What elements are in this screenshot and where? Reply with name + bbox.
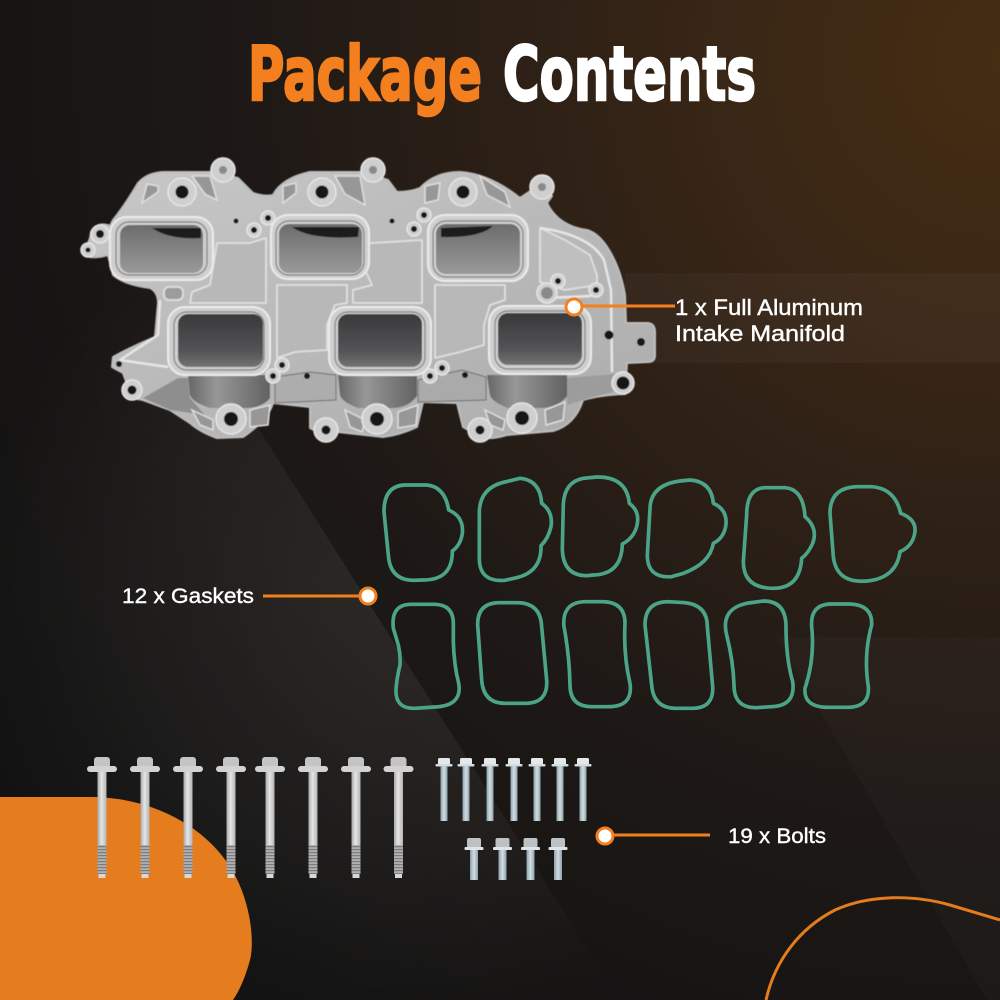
ports xyxy=(110,215,591,375)
callout: bolts xyxy=(597,824,826,848)
recessed plate panels xyxy=(164,228,597,358)
short bolts top row xyxy=(436,758,592,821)
manifold photo xyxy=(81,158,655,442)
gaskets top row xyxy=(384,477,915,588)
long bolts xyxy=(87,757,414,878)
title xyxy=(248,30,756,118)
top lobe pockets xyxy=(142,176,565,432)
callout: bolts: 19 x Bolts xyxy=(728,824,826,848)
bolt bosses xyxy=(81,158,645,442)
title: Package xyxy=(248,30,482,118)
decorative orange curve xyxy=(766,898,1000,1000)
callout: manifold xyxy=(566,295,863,346)
short bolts bottom row xyxy=(464,838,568,880)
callout: gaskets xyxy=(122,584,376,608)
callout: manifold: Intake Manifold xyxy=(675,321,845,346)
title: Contents xyxy=(503,30,756,118)
gaskets bottom row xyxy=(393,601,872,708)
callout: gaskets: 12 x Gaskets xyxy=(122,584,254,608)
decorative orange blob xyxy=(0,797,252,1000)
manifold silhouette xyxy=(82,172,655,438)
callout: manifold: 1 x Full Aluminum xyxy=(675,295,863,320)
upper and side casting ribs xyxy=(120,228,612,372)
lower runners xyxy=(143,370,627,415)
